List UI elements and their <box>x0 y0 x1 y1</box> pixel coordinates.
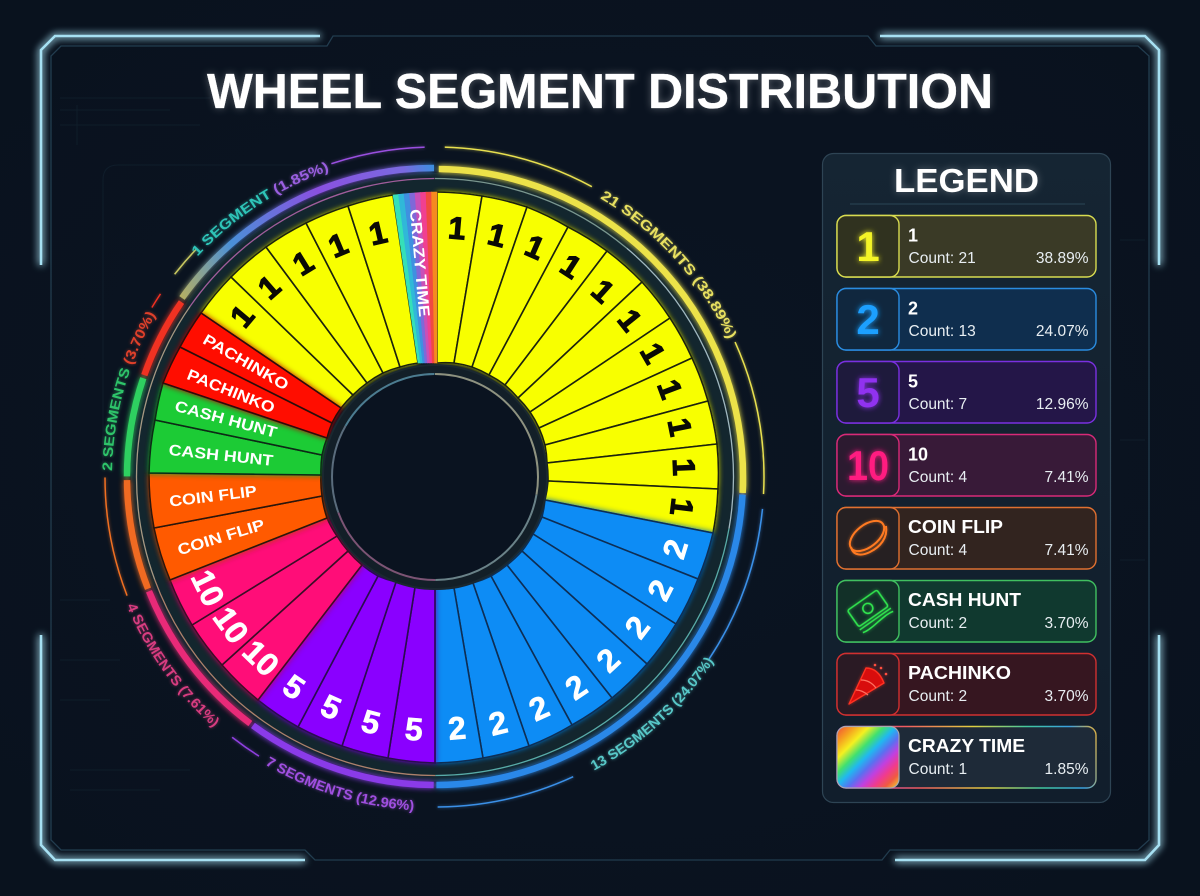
legend row: 1: 1 <box>908 226 918 246</box>
legend row: 10 <box>837 434 1096 496</box>
icon: coin <box>844 515 890 557</box>
hub inner ring <box>332 374 538 580</box>
legend row: 10: 10 <box>908 444 928 464</box>
legend row: coin flip <box>837 508 1096 569</box>
legend row: 2: Count: 13 <box>908 323 976 340</box>
legend row: cash hunt: Count: 2 <box>908 615 967 632</box>
wheel segments: 10 (pink) <box>170 518 362 700</box>
segment labels: coin flip <box>168 483 267 559</box>
segment labels: 1: 1 <box>484 216 510 254</box>
icon: rainbow swatch <box>837 726 899 788</box>
segment labels: 1: 1 <box>611 303 649 338</box>
thin inner ring <box>136 178 734 776</box>
segment count ring <box>127 169 743 785</box>
segment labels: 1: 1 <box>223 298 261 334</box>
arc label: 7 segments: 7 SEGMENTS (12.96%) <box>266 755 416 814</box>
icon: party cone <box>849 664 887 704</box>
legend row: 10: 7.41% <box>1045 469 1089 486</box>
segment labels: 5: 5 <box>276 667 311 707</box>
segment labels: 1: 1 <box>447 210 467 247</box>
wheel segment: crazy time <box>393 192 437 363</box>
crazy time count ring <box>182 168 434 298</box>
arc label: 2 segments: 2 SEGMENTS (3.70%) <box>100 310 158 472</box>
title: WHEEL SEGMENT DISTRIBUTION <box>207 65 993 119</box>
segment labels: 1: 1 <box>663 496 700 518</box>
segment labels: 2: 2 <box>485 704 511 743</box>
segment labels: 1: 1 <box>287 244 320 283</box>
legend row: 10: 10 <box>847 442 889 489</box>
legend heading: LEGEND <box>894 162 1039 199</box>
segment labels: pachinko <box>184 331 291 417</box>
segment labels: 1 <box>223 210 701 518</box>
segment labels: 1: 1 <box>633 337 672 369</box>
legend background <box>822 154 1110 802</box>
segment labels: 1: 1 <box>661 415 699 439</box>
segment labels: 2 <box>447 535 695 747</box>
outer thin arcs <box>105 147 765 807</box>
segment labels: pachinko: PACHINKO <box>184 367 277 417</box>
legend row: coin flip: COIN FLIP <box>908 517 1003 537</box>
legend row: 1: 38.89% <box>1036 250 1089 267</box>
segment labels: 5: 5 <box>358 703 384 742</box>
arc label: 4 segments: 4 SEGMENTS (7.61%) <box>127 602 220 730</box>
segment labels: 10: 10 <box>236 633 286 683</box>
wheel segments: 5 (purple) <box>258 565 435 763</box>
segment labels: 2: 2 <box>559 667 594 707</box>
wheel chart <box>100 144 767 814</box>
segment labels: 2: 2 <box>524 688 555 728</box>
arc label: 21 segments: 21 SEGMENTS (38.89%) <box>599 190 738 340</box>
legend row: pachinko: Count: 2 <box>908 688 967 705</box>
legend row: 2: 2 <box>908 298 918 318</box>
segment labels: 1: 1 <box>251 268 287 306</box>
legend row: 2: 2 <box>856 296 880 343</box>
segment labels: 1: 1 <box>650 375 689 403</box>
segment labels: 5 <box>276 667 424 748</box>
wheel segments: 2 (blue) <box>435 500 713 763</box>
wheel hub <box>323 365 547 589</box>
segment labels: cash hunt <box>168 398 279 470</box>
segment labels: 10 <box>184 564 286 683</box>
segment labels: cash hunt: CASH HUNT <box>168 442 275 470</box>
legend row: 5 <box>837 362 1096 423</box>
segment labels: 1: 1 <box>323 226 353 265</box>
segment labels: 2: 2 <box>589 641 627 679</box>
legend row: crazy time: Count: 1 <box>908 761 967 778</box>
segment labels: 10: 10 <box>206 600 256 650</box>
legend row: 5: 12.96% <box>1036 396 1089 413</box>
segment labels: 5: 5 <box>404 710 424 748</box>
legend row: 5: 5 <box>908 372 918 392</box>
legend row: 1: 1 <box>856 223 880 270</box>
icon: cash <box>847 589 894 634</box>
legend row: coin flip: 7.41% <box>1045 542 1089 559</box>
legend row: crazy time <box>837 726 1096 788</box>
legend row: 10: Count: 4 <box>908 469 967 486</box>
segment labels: 2: 2 <box>655 535 695 563</box>
legend row: 5: 5 <box>856 369 880 416</box>
segment labels: 1: 1 <box>366 214 390 252</box>
legend row: 5: Count: 7 <box>908 396 967 413</box>
segment labels: 1: 1 <box>666 458 701 476</box>
legend row: pachinko: PACHINKO <box>908 663 1011 683</box>
wheel ring background <box>141 183 729 771</box>
segment labels: 10: 10 <box>184 564 232 612</box>
wheel segments: cash hunt (green) <box>149 383 327 475</box>
legend row: pachinko: 3.70% <box>1045 688 1089 705</box>
panel: legend <box>822 154 1110 802</box>
legend row: cash hunt <box>837 580 1096 642</box>
segment labels: coin flip: COIN FLIP <box>168 483 258 511</box>
segment labels: 2: 2 <box>617 609 657 645</box>
wheel segments: pachinko (red) <box>163 313 341 438</box>
legend row: crazy time: 1.85% <box>1045 761 1089 778</box>
arc label: 1 segment: 1 SEGMENT (1.85%) <box>190 160 330 257</box>
segment labels: cash hunt: CASH HUNT <box>173 398 279 442</box>
segment labels: pachinko: PACHINKO <box>200 331 291 394</box>
segment labels: coin flip: COIN FLIP <box>176 517 267 559</box>
arc label: 13 segments: 13 SEGMENTS (24.07%) <box>590 656 716 772</box>
legend row: cash hunt: CASH HUNT <box>908 590 1021 610</box>
segment label: crazy time: CRAZY TIME <box>406 209 432 318</box>
segment labels: 2: 2 <box>447 709 467 747</box>
segment labels: 1: 1 <box>554 247 588 286</box>
wheel segments: 1 (yellow) <box>201 192 718 533</box>
segment labels: 1: 1 <box>585 272 621 310</box>
legend row: cash hunt: 3.70% <box>1045 615 1089 632</box>
segment labels: 1: 1 <box>520 228 550 267</box>
legend row: coin flip: Count: 4 <box>908 542 967 559</box>
legend row: 1 <box>837 216 1096 277</box>
legend row: pachinko <box>837 654 1096 715</box>
wheel segments: coin flip (orange) <box>149 473 327 580</box>
legend row: 1: Count: 21 <box>908 250 976 267</box>
segment labels: 2: 2 <box>640 574 680 606</box>
segment labels: 5: 5 <box>315 687 346 727</box>
legend row: 2 <box>837 288 1096 350</box>
legend row: 2: 24.07% <box>1036 323 1089 340</box>
legend row: crazy time: CRAZY TIME <box>908 736 1025 756</box>
